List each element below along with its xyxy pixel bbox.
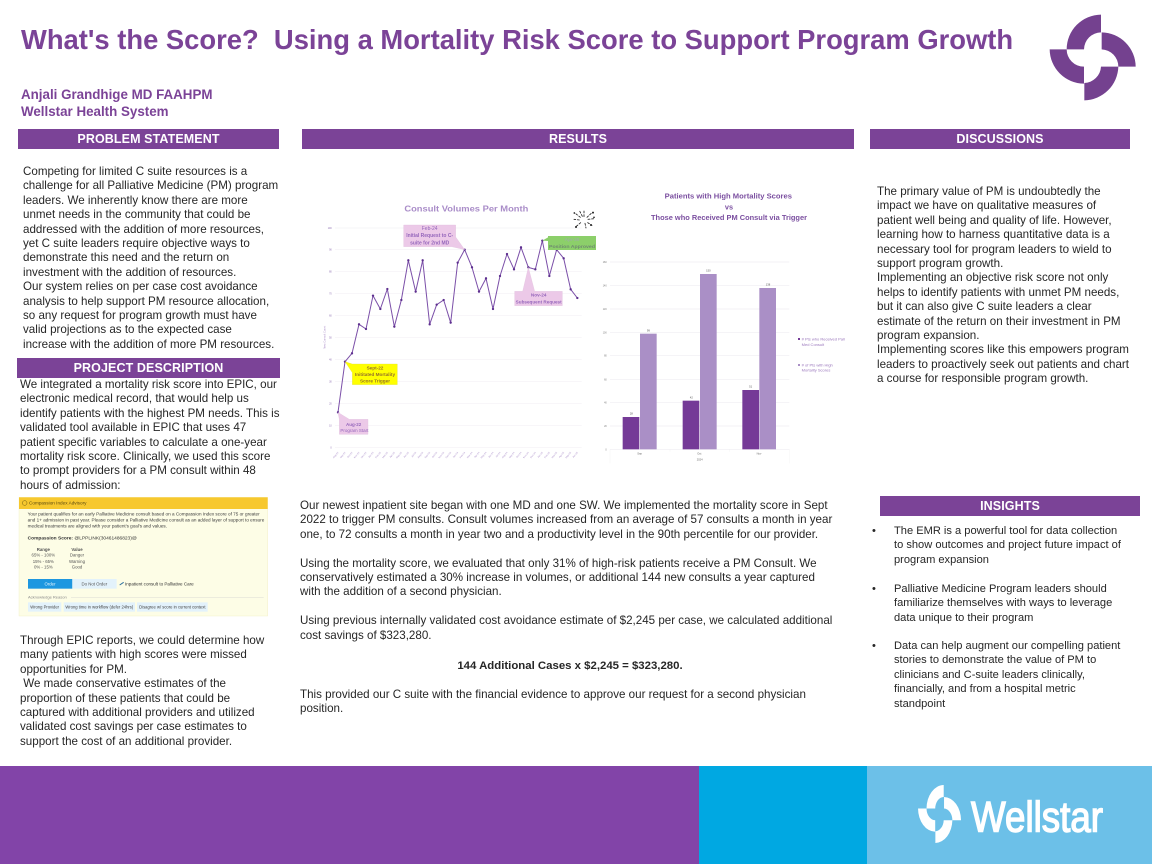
line chart: consult volumes per month: Jan-24 bbox=[453, 451, 460, 459]
line chart: consult volumes per month: Sep-22 bbox=[340, 451, 347, 459]
EPIC advisory screenshot: Good bbox=[72, 565, 83, 570]
text: discussions: The primary value of PM is undoubtedly the impact we have on qualitative measures of patient well being and quality of life. However, learning how to harness quantitative data is a necessary tool for program leaders to wield to support program growth. Implementing an objective risk score not only helps to identify patients with unmet PM needs, but it can also give C suite leaders a clear estimate of the return on their investment in PM program expansion. Implementing scores like this empowers program leaders to proactively seek out patients and chart a course for responsible program growth. bbox=[877, 185, 1129, 385]
callout: Sept-22: Inititated Mortality bbox=[355, 372, 395, 377]
line chart: consult volumes per month: 40 bbox=[329, 360, 332, 362]
text: cost equation: 144 Additional Cases x $2,245 = $323,280. bbox=[457, 660, 683, 672]
line chart: consult volumes per month: Nov-24 bbox=[523, 451, 530, 459]
callout: Aug-22: Program Start bbox=[340, 428, 369, 433]
heading: project description bbox=[17, 358, 280, 378]
line chart: consult volumes per month: Nov-23 bbox=[439, 451, 446, 459]
callout: Position Approved: Position Approved bbox=[549, 244, 595, 249]
line chart: consult volumes per month: 60 bbox=[329, 316, 332, 318]
list: insights: • bbox=[872, 640, 876, 652]
callout: Nov-24: Nov-24 bbox=[531, 293, 547, 298]
line chart: consult volumes per month: Mar-24 bbox=[466, 451, 474, 459]
EPIC advisory screenshot: and 1+ admission in past year. Please consider a Palliative Medicine consult as an added layer of support to ensure bbox=[28, 517, 265, 522]
line chart: consult volumes per month: May-24 bbox=[481, 451, 488, 459]
callout: Nov-24 bbox=[515, 267, 562, 306]
bar chart: high mortality vs PM consult: 28 bbox=[630, 412, 633, 416]
bar chart: high mortality vs PM consult: 140 bbox=[603, 285, 607, 287]
bar chart: high mortality vs PM consult: 160 bbox=[603, 262, 607, 264]
heading: results bbox=[302, 129, 854, 149]
footer band bbox=[0, 766, 1152, 864]
EPIC advisory screenshot: Disagree w/ score in current context bbox=[139, 604, 206, 609]
line chart: consult volumes per month bbox=[322, 203, 596, 459]
bar chart: high mortality vs PM consult: 2024 bbox=[697, 457, 703, 461]
EPIC advisory screenshot: medical treatments are aligned with your patient's goal's and values. bbox=[28, 523, 167, 528]
line chart: consult volumes per month: May-23 bbox=[396, 451, 403, 459]
callout: Feb-24 bbox=[404, 225, 465, 250]
line chart: consult volumes per month: Dec-23 bbox=[446, 451, 453, 459]
bar chart: high mortality vs PM consult: Oct bbox=[697, 451, 702, 455]
line chart: consult volumes per month: 80 bbox=[329, 272, 332, 274]
bar chart: high mortality vs PM consult: Nov bbox=[757, 451, 762, 455]
heading: discussions bbox=[870, 129, 1130, 149]
text: EPIC reports: Through EPIC reports, we could determine how many patients with high scores were missed opportunities for PM. We made conservative estimates of the proportion of these patients that could be captured with additional providers and utilized validated cost savings per case estimates to support the cost of an additional provider. bbox=[20, 634, 264, 748]
EPIC advisory screenshot: Inpatient consult to Palliative Care bbox=[125, 581, 194, 586]
line chart: consult volumes per month: Jun-25 bbox=[573, 451, 579, 459]
bar chart: high mortality vs PM consult: 0 bbox=[605, 449, 607, 451]
heading: project description: PROJECT DESCRIPTION bbox=[74, 361, 223, 375]
callout: Position Approved: Apr-25 bbox=[565, 237, 580, 242]
line chart: consult volumes per month: Aug-23 bbox=[417, 451, 425, 459]
legend: Med Consult bbox=[802, 342, 825, 347]
EPIC advisory screenshot: 0% - 15% bbox=[34, 565, 53, 570]
bar chart: high mortality vs PM consult: 51 bbox=[749, 385, 753, 389]
line chart: consult volumes per month: Mar-25 bbox=[551, 451, 559, 459]
EPIC advisory screenshot: Range bbox=[37, 547, 51, 552]
bar chart: high mortality vs PM consult: Sep bbox=[637, 451, 643, 455]
icon: fireworks bbox=[574, 211, 595, 228]
EPIC advisory screenshot: Value bbox=[71, 547, 83, 552]
callout: Feb-24: Feb-24 bbox=[422, 226, 438, 232]
line chart: consult volumes per month: 100 bbox=[328, 228, 332, 230]
callout: Sept-22: Sept-22 bbox=[367, 366, 384, 371]
callout: Position Approved bbox=[542, 236, 596, 250]
heading: insights: INSIGHTS bbox=[980, 499, 1040, 513]
line chart: consult volumes per month: Sep-24 bbox=[509, 451, 516, 459]
legend: Mortality Scores bbox=[802, 368, 830, 373]
bar chart: high mortality vs PM consult: 42 bbox=[690, 395, 693, 399]
callout: Aug-22 bbox=[338, 412, 369, 434]
list: insights: The EMR is a powerful tool for data collection to show outcomes and project future impact of program expansion bbox=[894, 525, 1121, 566]
bar chart: high mortality vs PM consult: 150 bbox=[706, 269, 711, 273]
EPIC advisory screenshot: Danger bbox=[70, 553, 85, 558]
line chart: consult volumes per month: Dec-22 bbox=[361, 451, 368, 459]
line chart: consult volumes per month: 20 bbox=[329, 404, 332, 406]
bar chart: high mortality vs PM consult: 40 bbox=[604, 403, 607, 405]
heading: results: RESULTS bbox=[549, 132, 607, 146]
bar chart: high mortality vs PM consult: 80 bbox=[604, 356, 607, 358]
legend bbox=[798, 336, 845, 373]
line chart: consult volumes per month: Apr-23 bbox=[389, 451, 396, 459]
line chart: consult volumes per month: Apr-24 bbox=[474, 451, 481, 459]
line chart: consult volumes per month: Jun-23 bbox=[404, 451, 410, 459]
line chart: consult volumes per month: Oct-24 bbox=[516, 451, 523, 459]
EPIC advisory screenshot: 65% - 100% bbox=[32, 553, 55, 558]
heading: problem statement: PROBLEM STATEMENT bbox=[77, 132, 220, 146]
text: problem statement: Competing for limited C suite resources is a challenge for all Palliative Medicine (PM) program leaders. We inherently know there are more unmet needs in the community that could be addressed with the addition of more resources, yet C suite leaders require objective ways to demonstrate this need and the return on investment with the addition of resources. Our system relies on per case cost avoidance analysis to help support PM resource allocation, so any request for program growth must have valid projections as to the expected case increase with the addition of more PM resources. bbox=[23, 165, 278, 351]
line chart: consult volumes per month: Jan-25 bbox=[538, 451, 544, 459]
EPIC advisory screenshot: Compassion Score: @LPPLINK(30461486823)@ bbox=[28, 535, 137, 541]
line chart: consult volumes per month: 0 bbox=[330, 448, 332, 450]
line chart: consult volumes per month: Apr-25 bbox=[558, 451, 566, 459]
list: insights: Data can help augment our compelling patient stories to demonstrate the value of PM to clinicians and C-suite leaders clinically, financially, and from a hospital metric standpoint bbox=[894, 640, 1120, 710]
callout: Nov-24: Subsequent Request bbox=[516, 300, 562, 305]
EPIC advisory screenshot bbox=[18, 497, 268, 616]
line chart: consult volumes per month: Feb-25 bbox=[544, 451, 551, 459]
bar chart: high mortality vs PM consult: 138 bbox=[766, 283, 771, 287]
line chart: consult volumes per month: 10 bbox=[329, 426, 332, 428]
callout: Sept-22 bbox=[345, 362, 397, 385]
icon: Wellstar purple logo bbox=[1050, 14, 1136, 100]
bar chart: high mortality vs PM consult: 99 bbox=[647, 328, 650, 332]
bar chart: high mortality vs PM consult: 120 bbox=[603, 309, 607, 311]
logo: Wellstar white: Wellstar bbox=[971, 794, 1103, 842]
list: insights: • bbox=[872, 525, 876, 537]
bar chart: high mortality vs PM consult: 100 bbox=[603, 332, 607, 334]
line chart: consult volumes per month: Jun-24 bbox=[488, 451, 495, 459]
line chart: consult volumes per month: 90 bbox=[329, 250, 332, 252]
line chart: consult volumes per month: Nov-22 bbox=[354, 451, 361, 459]
line chart: consult volumes per month: Jul-23 bbox=[411, 451, 418, 458]
bar chart: high mortality vs PM consult bbox=[602, 191, 845, 463]
callout: Feb-24: suite for 2nd MD bbox=[410, 240, 450, 246]
chart title: Patients with High Mortality Scores bbox=[665, 191, 792, 200]
heading: problem statement bbox=[18, 129, 279, 149]
line chart: consult volumes per month: Feb-23 bbox=[375, 451, 382, 459]
line chart: consult volumes per month: Jan-23 bbox=[368, 451, 375, 459]
text: results conclusion: This provided our C suite with the financial evidence to approve our request for a second physician position. bbox=[300, 688, 806, 715]
callout: Sept-22: Score Trigger bbox=[360, 379, 390, 384]
chart title: vs bbox=[725, 202, 733, 211]
chart title: Consult Volumes Per Month bbox=[404, 203, 528, 213]
EPIC advisory screenshot: Do Not Order bbox=[81, 581, 108, 586]
EPIC advisory screenshot: Your patient qualifies for an early Palliative Medicine consult based on a Compassion Index score of 75 or greater bbox=[28, 512, 260, 517]
line chart: consult volumes per month: Oct-22 bbox=[347, 451, 354, 459]
line chart: consult volumes per month: Feb-24 bbox=[460, 451, 467, 459]
bar chart: high mortality vs PM consult: 60 bbox=[604, 379, 607, 381]
line chart: consult volumes per month: Oct-23 bbox=[431, 451, 439, 459]
line chart: consult volumes per month: Mar-23 bbox=[382, 451, 389, 459]
EPIC advisory screenshot: Compassion Index Advisory bbox=[29, 501, 87, 506]
logo: Wellstar white bbox=[918, 785, 1103, 843]
line chart: consult volumes per month: Aug-24 bbox=[501, 451, 509, 459]
heading: insights bbox=[880, 496, 1140, 516]
text: project description: We integrated a mortality risk score into EPIC, our electronic medical record, that would help us identify patients with the highest PM needs. This is validated tool available in EPIC that uses 47 patient specific variables to calculate a one-year mortality risk score. Clinically, we used this score to prompt providers for a PM consult within 48 hours of admission: bbox=[20, 378, 280, 492]
line chart: consult volumes per month: Sep-23 bbox=[425, 451, 432, 459]
list: insights bbox=[872, 525, 1121, 710]
text: results narrative: Our newest inpatient site began with one MD and one SW. We implemented the mortality score in Sept 2022 to trigger PM consults. Consult volumes increased from an average of 57 consults a month in year one, to 72 consults a month in year two and a productivity level in the 90th percentile for our provider. Using the mortality score, we evaluated that only 31% of high-risk patients receive a PM Consult. We conservatively estimated a 30% increase in volumes, or additional 144 new consults a year captured with the addition of a second physician. Using previous internally validated cost avoidance estimate of $2,245 per case, we calculated additional cost savings of $323,280. bbox=[300, 499, 832, 642]
chart title: Those who Received PM Consult via Trigger bbox=[651, 213, 807, 222]
bar chart: high mortality vs PM consult: 20 bbox=[604, 426, 607, 428]
callout: Aug-22: Aug-22 bbox=[346, 422, 362, 427]
EPIC advisory screenshot: Acknowledge Reason bbox=[28, 595, 67, 600]
line chart: consult volumes per month: 50 bbox=[329, 338, 332, 340]
EPIC advisory screenshot: 15% - 65% bbox=[33, 559, 54, 564]
callout: Feb-24: Initial Request to C- bbox=[406, 233, 453, 239]
line chart: consult volumes per month: Dec-24 bbox=[530, 451, 537, 459]
EPIC advisory screenshot: Wrong time in workflow (defer 24hrs) bbox=[65, 604, 134, 609]
line chart: consult volumes per month: 70 bbox=[329, 294, 332, 296]
EPIC advisory screenshot: Order bbox=[44, 581, 56, 586]
heading: discussions: DISCUSSIONS bbox=[956, 132, 1044, 146]
legend: # of Pts with High bbox=[802, 362, 833, 367]
list: insights: Palliative Medicine Program leaders should familiarize themselves with ways to leverage data unique to their program bbox=[894, 583, 1112, 624]
line chart: consult volumes per month: Aug-22 bbox=[332, 451, 340, 459]
line chart: consult volumes per month: 30 bbox=[329, 382, 332, 384]
title: What's the Score? Using a Mortality Risk Score to Support Program Growth bbox=[21, 24, 1013, 55]
legend: # Pts who Received Pall bbox=[802, 336, 845, 341]
line chart: consult volumes per month: New Consult Count bbox=[322, 326, 326, 349]
EPIC advisory screenshot: Warning bbox=[69, 559, 86, 564]
authors: Anjali Grandhige MD FAAHPM Wellstar Health System bbox=[21, 87, 212, 119]
line chart: consult volumes per month: May-25 bbox=[566, 451, 573, 459]
chart title bbox=[651, 191, 807, 222]
list: insights: • bbox=[872, 583, 876, 595]
EPIC advisory screenshot: Wrong Provider bbox=[30, 604, 60, 609]
line chart: consult volumes per month: Jul-24 bbox=[496, 451, 502, 458]
